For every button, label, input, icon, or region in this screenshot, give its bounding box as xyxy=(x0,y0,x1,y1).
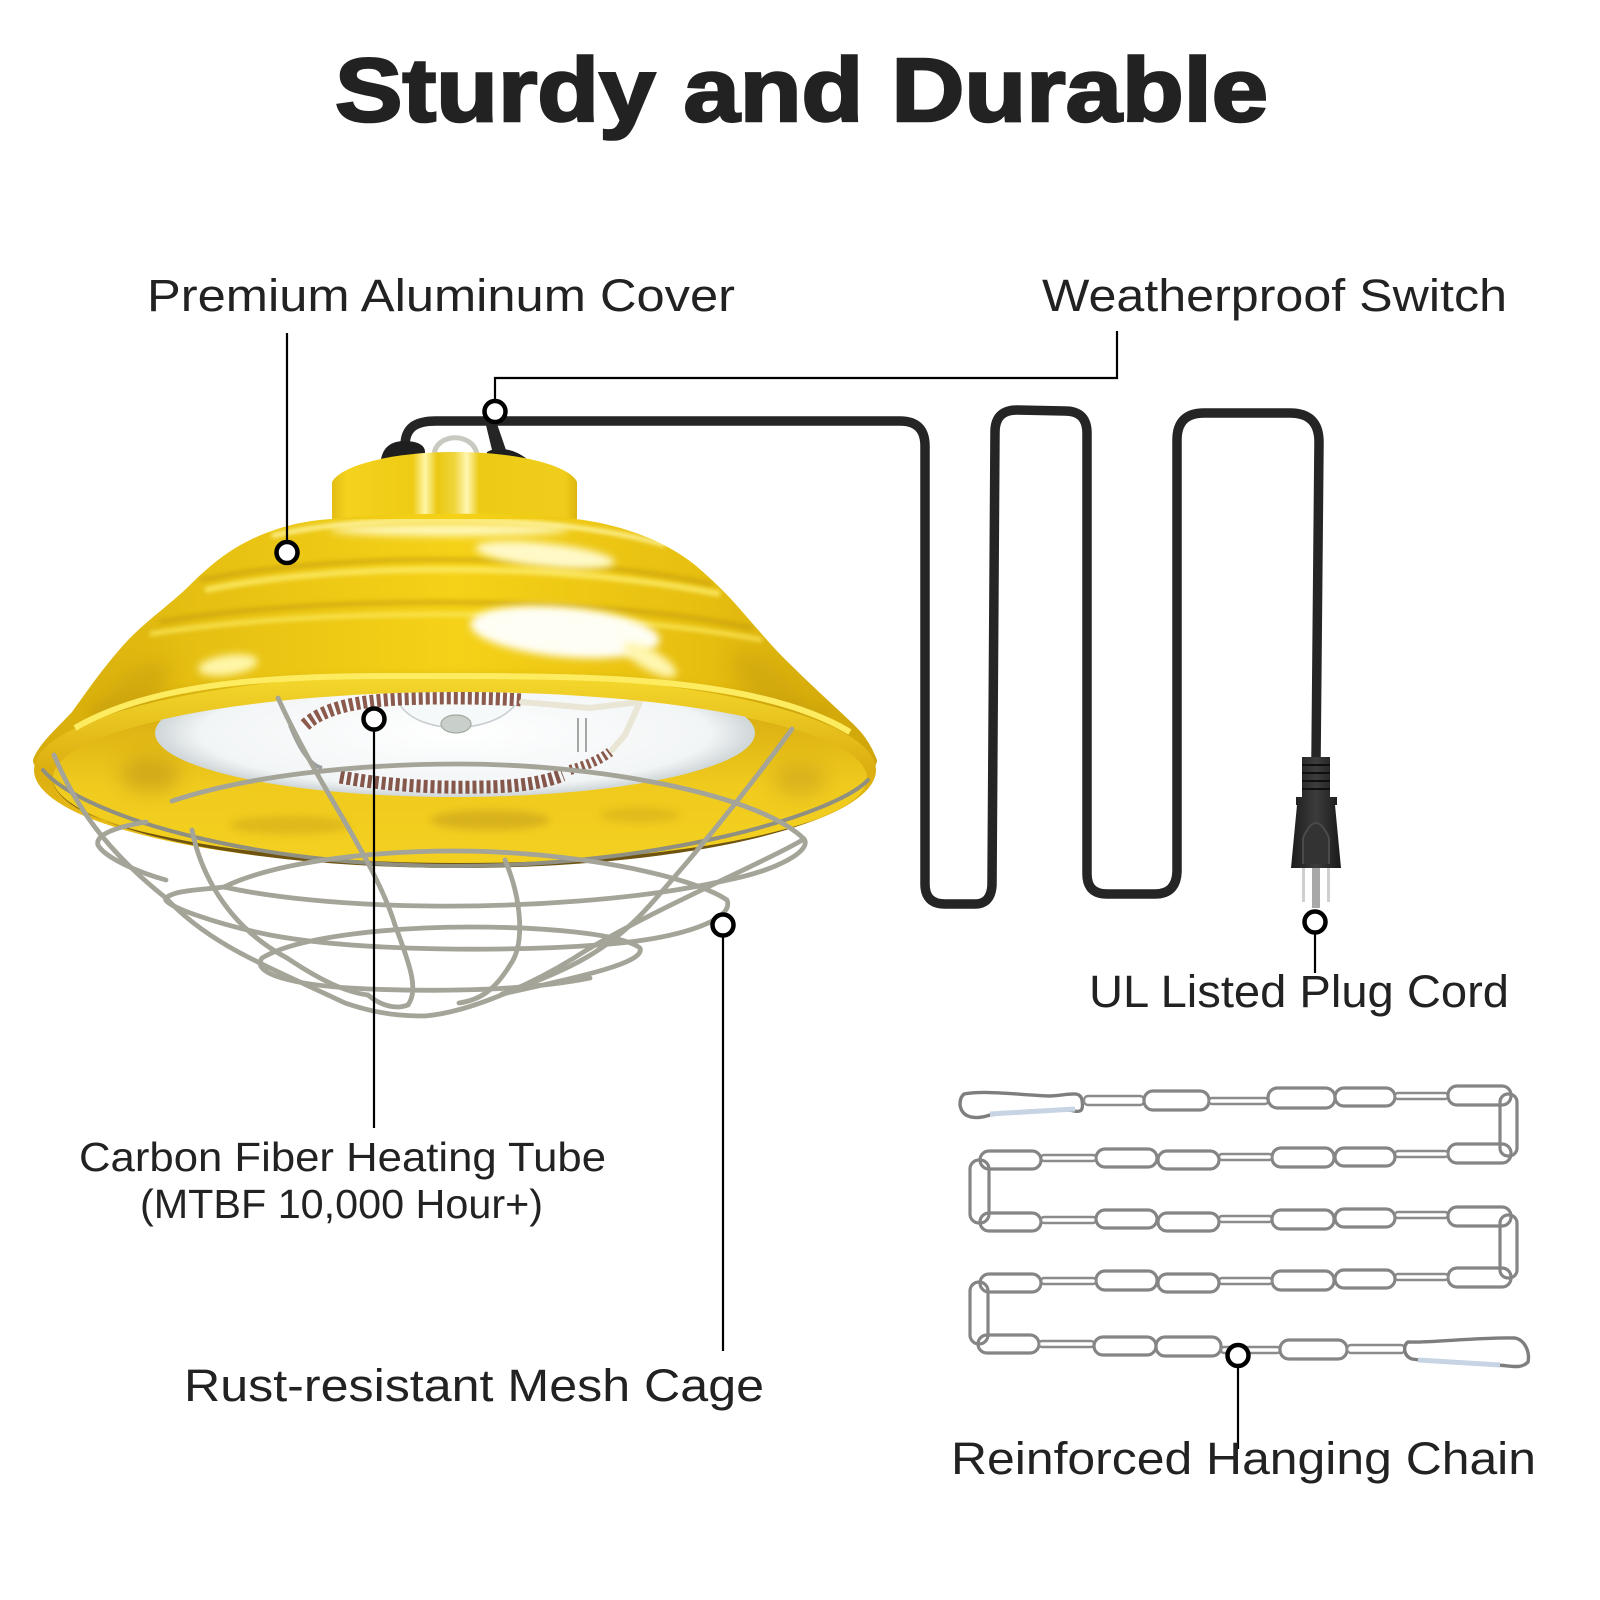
title: Sturdy and Durable xyxy=(335,41,1268,141)
label: reinforced hanging chain: Reinforced Hanging Chain xyxy=(951,1433,1536,1484)
chain row 1 xyxy=(1084,1086,1511,1110)
chain row 5 xyxy=(978,1335,1405,1359)
shade highlights xyxy=(90,519,819,716)
callout: cage leader xyxy=(712,914,734,1351)
label: rust-resistant mesh cage: Rust-resistant Mesh Cage xyxy=(184,1360,764,1411)
chain row 4 xyxy=(980,1268,1511,1292)
vertical link left A xyxy=(970,1160,989,1223)
chain xyxy=(960,1086,1528,1367)
cap cylinder xyxy=(332,452,577,519)
lamp: interior with reflector xyxy=(53,692,867,863)
chain row 2 xyxy=(980,1144,1511,1169)
icon: cable glands xyxy=(381,421,527,459)
label: premium aluminum cover: Premium Aluminum Cover xyxy=(147,270,735,321)
label: weatherproof switch: Weatherproof Switch xyxy=(1042,270,1507,321)
vertical link right A xyxy=(1500,1094,1517,1156)
rib: left short xyxy=(192,830,368,995)
coil: right end xyxy=(570,752,610,770)
mesh cage xyxy=(43,698,868,1016)
coil: top xyxy=(305,698,522,725)
vertical link right B xyxy=(1500,1215,1517,1278)
callout: plug leader xyxy=(1304,912,1326,973)
bulb dome xyxy=(400,705,515,728)
rib: inner left long xyxy=(278,698,413,1007)
callout: chain leader xyxy=(1228,1345,1248,1449)
label: carbon fiber heating tube: (MTBF 10,000 Hour+) xyxy=(140,1181,543,1227)
plug xyxy=(1291,757,1341,908)
chain row 3 xyxy=(980,1207,1511,1231)
callout: heating tube leader xyxy=(364,708,384,1128)
label: UL listed plug cord: UL Listed Plug Cord xyxy=(1089,966,1509,1017)
brown underside xyxy=(52,778,866,868)
carabiner right xyxy=(1405,1338,1528,1367)
rib: right inner xyxy=(459,860,520,1003)
callout: aluminum cover leader xyxy=(276,333,298,563)
rim band wire xyxy=(43,770,868,866)
label: carbon fiber heating tube xyxy=(79,1134,606,1227)
coil: bottom xyxy=(340,775,563,787)
vertical link left B xyxy=(970,1282,988,1344)
carabiner left xyxy=(960,1092,1082,1118)
icon: hanging hook xyxy=(434,438,477,455)
lamp: top cap, glands and shade xyxy=(33,421,877,868)
shade body xyxy=(33,514,877,868)
rim lip xyxy=(34,673,876,867)
reflector xyxy=(155,692,755,797)
ceramic holders xyxy=(522,702,640,750)
callout: switch leader xyxy=(484,331,1117,422)
ring: upper spiral xyxy=(172,764,805,906)
rib: right long xyxy=(502,729,792,994)
rib: left outer xyxy=(54,755,804,1016)
ring: left hook xyxy=(98,822,166,880)
power cord xyxy=(405,410,1319,904)
label: carbon fiber heating tube: Carbon Fiber Heating Tube xyxy=(79,1134,606,1180)
ring: lower xyxy=(260,927,640,994)
ring: middle xyxy=(166,851,728,949)
